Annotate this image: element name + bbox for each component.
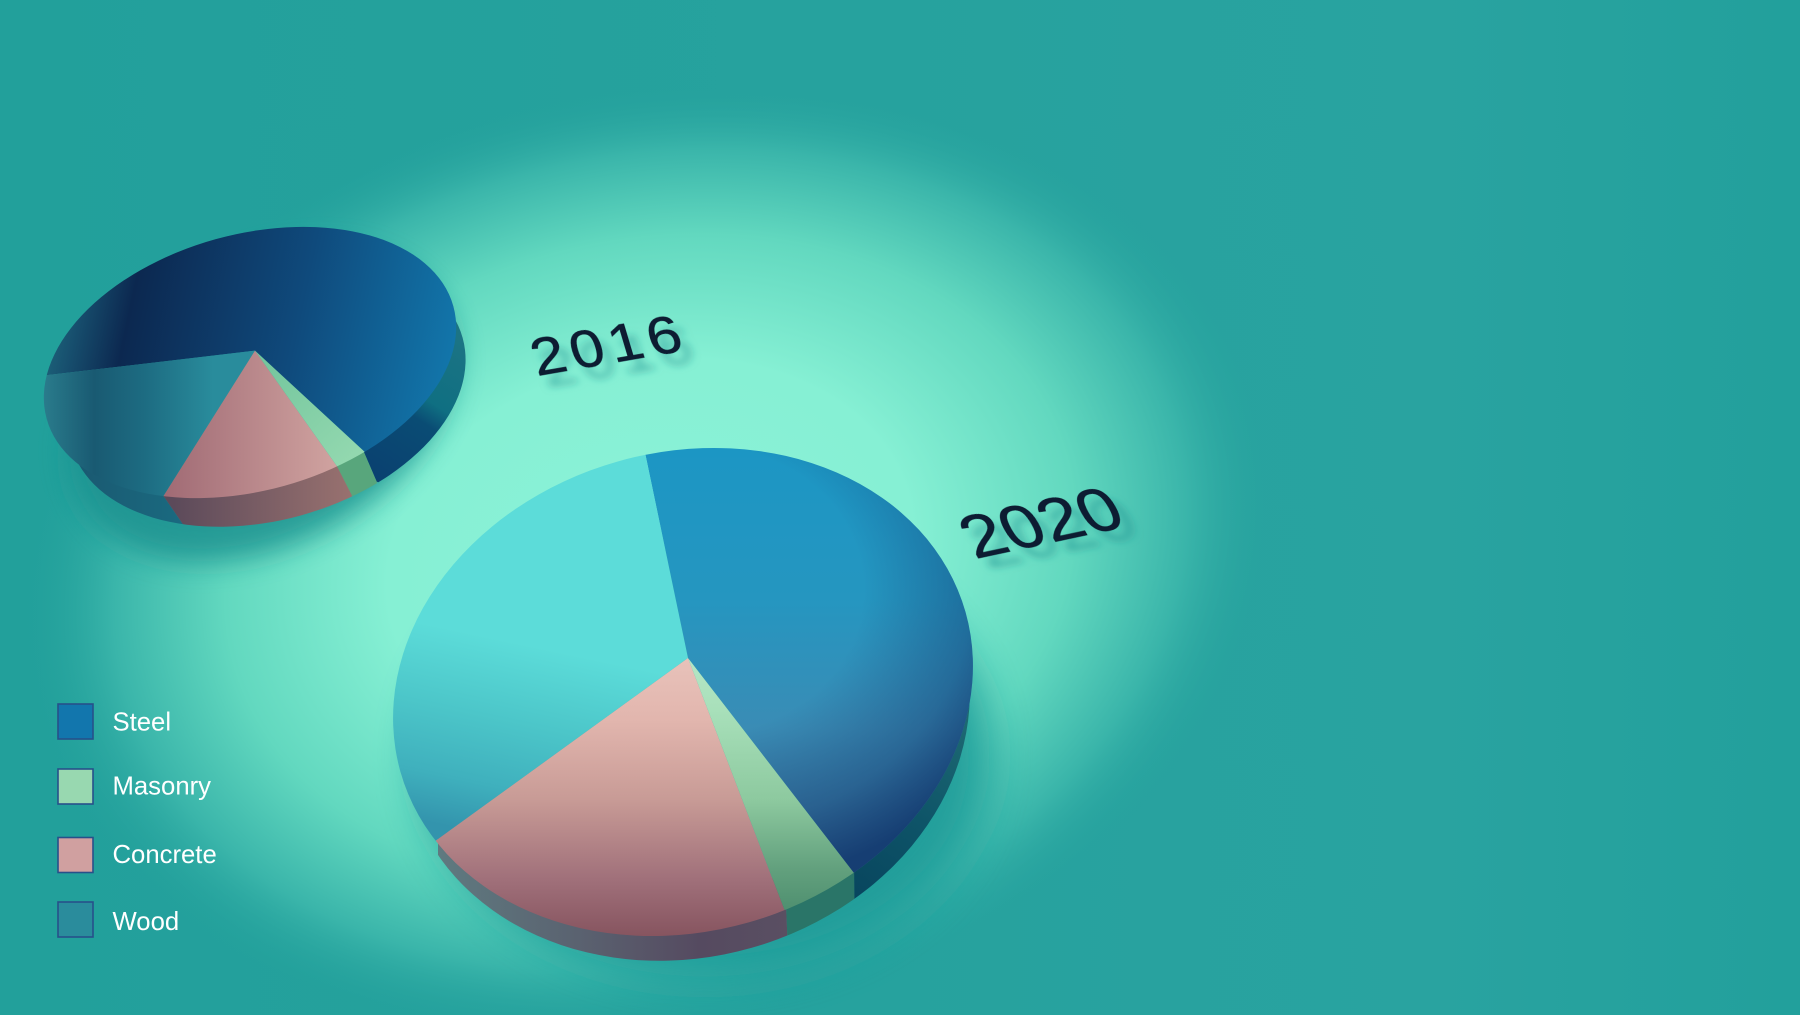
legend item: masonry — [58, 769, 211, 804]
pie 2020 side wall — [438, 702, 970, 961]
slice: wood 2020 — [393, 454, 688, 840]
shadow: 2020 pie — [420, 533, 990, 977]
legend item: steel: Steel — [112, 708, 171, 736]
label: 2016: 2016 — [523, 303, 695, 388]
legend item: wood — [58, 902, 179, 937]
slice: concrete 2016 — [164, 350, 337, 498]
label: 2020: 2020 — [946, 474, 1136, 572]
pie 2016 side wall — [79, 320, 466, 527]
slice: concrete 2020 — [436, 658, 784, 936]
pie chart: 2016 — [44, 226, 466, 527]
legend item: concrete: Concrete — [112, 841, 217, 869]
shadow: 2016 pie — [15, 185, 509, 625]
slice: wood 2016 — [44, 350, 254, 496]
pie chart: 2020 — [393, 448, 973, 961]
slice: steel 2016 — [46, 226, 456, 452]
legend — [58, 704, 217, 937]
pie 2016 top face — [44, 226, 456, 498]
slice: steel 2020 — [646, 448, 973, 872]
legend item: wood: Wood — [112, 908, 179, 936]
legend item: concrete — [58, 838, 217, 872]
legend item: masonry: Masonry — [112, 772, 211, 800]
slice: masonry 2020 — [688, 658, 854, 910]
pie 2020 top face — [393, 448, 973, 936]
slice: masonry 2016 — [255, 350, 365, 466]
legend item: steel — [58, 704, 171, 739]
